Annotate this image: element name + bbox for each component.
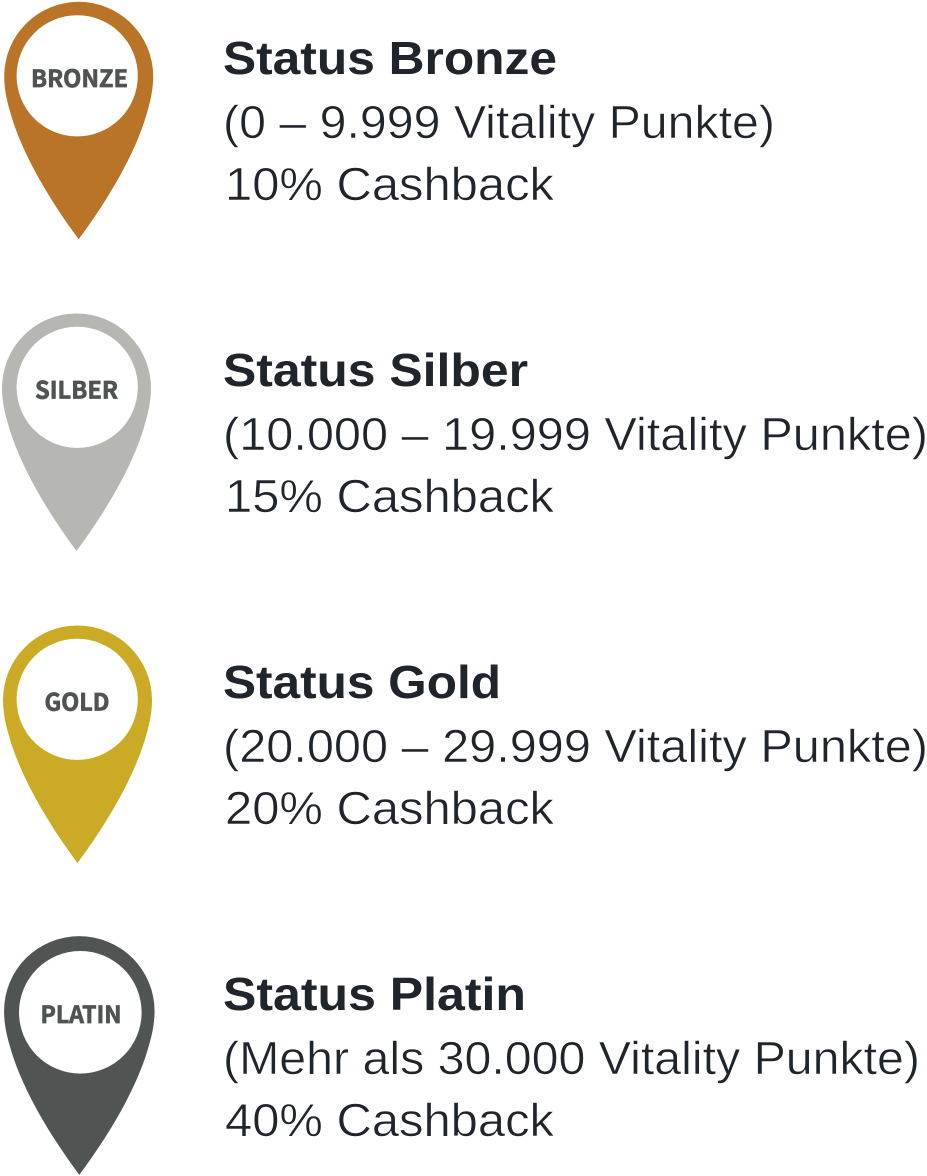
icon: platinum pin bbox=[4, 936, 155, 1175]
text: platin cashback: 40% Cashback bbox=[225, 1094, 555, 1146]
text: silber points range: (10.000 – 19.999 Vitality Punkte) bbox=[223, 408, 927, 460]
text: silber cashback: 15% Cashback bbox=[225, 470, 555, 522]
heading: status silber: Status Silber bbox=[223, 344, 528, 396]
text: bronze points range: (0 – 9.999 Vitality Punkte) bbox=[223, 96, 775, 148]
tier: gold bbox=[3, 626, 927, 863]
tier: bronze bbox=[4, 2, 775, 239]
text: platin points range: (Mehr als 30.000 Vitality Punkte) bbox=[223, 1032, 920, 1084]
text: bronze cashback: 10% Cashback bbox=[225, 158, 555, 210]
icon: bronze pin: BRONZE bbox=[31, 60, 128, 94]
icon: gold pin: GOLD bbox=[44, 684, 110, 718]
heading: status platin: Status Platin bbox=[223, 968, 526, 1020]
icon: silver pin: SILBER bbox=[35, 372, 118, 406]
heading: status bronze: Status Bronze bbox=[223, 32, 557, 84]
icon: platinum pin: PLATIN bbox=[40, 996, 122, 1030]
icon: silver pin bbox=[2, 314, 151, 551]
icon: gold pin bbox=[3, 626, 152, 863]
heading: status gold: Status Gold bbox=[223, 656, 501, 708]
tier: silber bbox=[2, 314, 927, 551]
text: gold cashback: 20% Cashback bbox=[225, 782, 555, 834]
text: gold points range: (20.000 – 29.999 Vitality Punkte) bbox=[223, 720, 927, 772]
tier: platin bbox=[4, 936, 920, 1175]
icon: bronze pin bbox=[4, 2, 153, 239]
